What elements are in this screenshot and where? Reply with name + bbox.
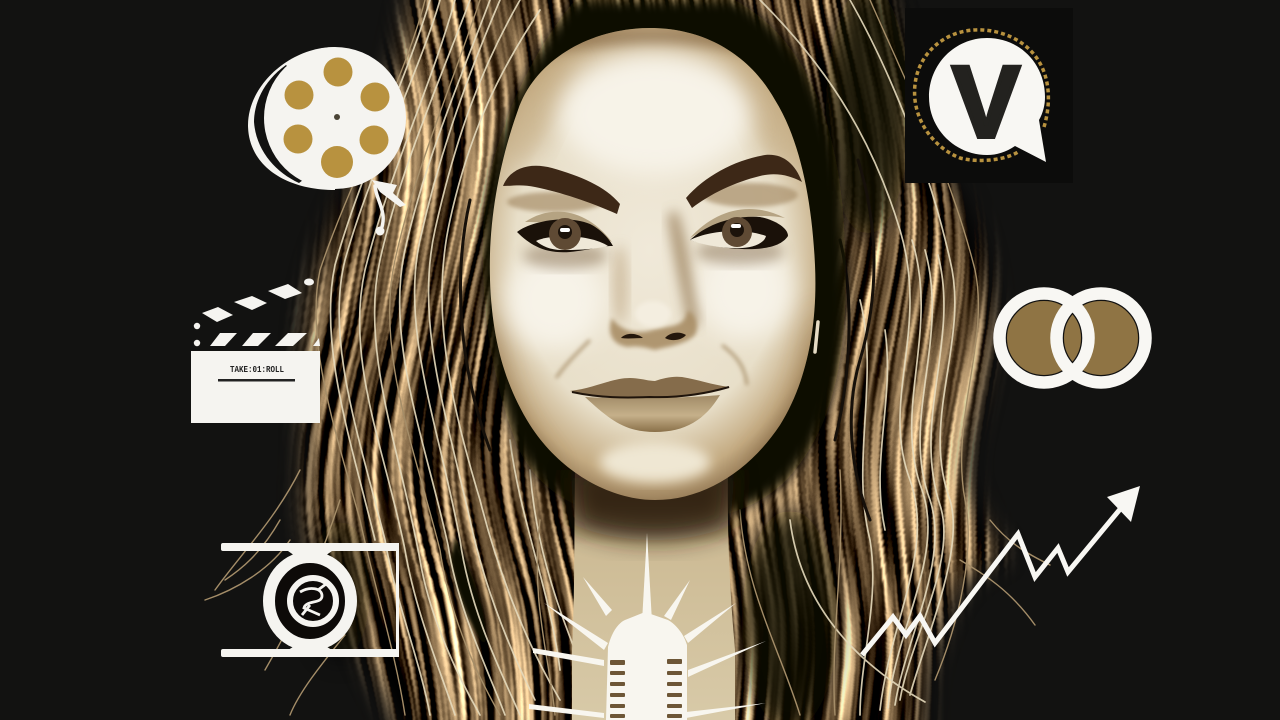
icon: V speech bubble: [905, 8, 1073, 183]
icon: clapperboard: [191, 278, 320, 423]
face: [480, 28, 825, 500]
infographic illustration: [191, 0, 1152, 720]
rings: [1000, 294, 1146, 382]
neck shadow: [570, 470, 735, 540]
shadow around face: [483, 0, 846, 521]
hair: [204, 0, 1051, 720]
neck: [570, 470, 735, 720]
lips: [570, 377, 730, 432]
right eye: [690, 209, 788, 249]
earring: [815, 322, 818, 352]
mic rays: [642, 533, 652, 622]
hair texture: [286, 0, 1016, 720]
reel crescent gap: [254, 65, 330, 183]
tan strands: [205, 0, 1050, 715]
letter V: V: [952, 45, 1020, 159]
clapper stripes: [210, 333, 320, 346]
bubble: [929, 38, 1046, 162]
cream strands: [330, 0, 955, 715]
reel tail: [375, 186, 383, 230]
icon: film frame with lens: [221, 543, 399, 657]
lens: [269, 557, 351, 645]
nose: [610, 301, 697, 350]
clapper arm: [194, 278, 314, 346]
reel holes: [284, 58, 390, 178]
icon: microphone: [529, 533, 766, 720]
gold chain: [915, 30, 1048, 160]
mic slots: [610, 659, 682, 718]
mic body: [606, 612, 687, 720]
right eyebrow: [686, 155, 802, 208]
icon: venn rings: [1000, 294, 1146, 382]
reel outer arc: [248, 47, 335, 190]
dark strands: [460, 160, 874, 520]
left eye: [517, 212, 613, 252]
reel disc: [264, 47, 406, 189]
face shading: [480, 28, 825, 482]
clapper label: TAKE:01:ROLL: [230, 365, 284, 375]
left eyebrow: [503, 166, 620, 214]
hair dark regions: [310, 0, 910, 720]
icon: film reel: [248, 47, 406, 236]
clapper board: [191, 351, 320, 423]
lens squiggle: [300, 584, 326, 615]
icon: rising chart arrow: [862, 486, 1140, 655]
face shape: [490, 28, 815, 500]
